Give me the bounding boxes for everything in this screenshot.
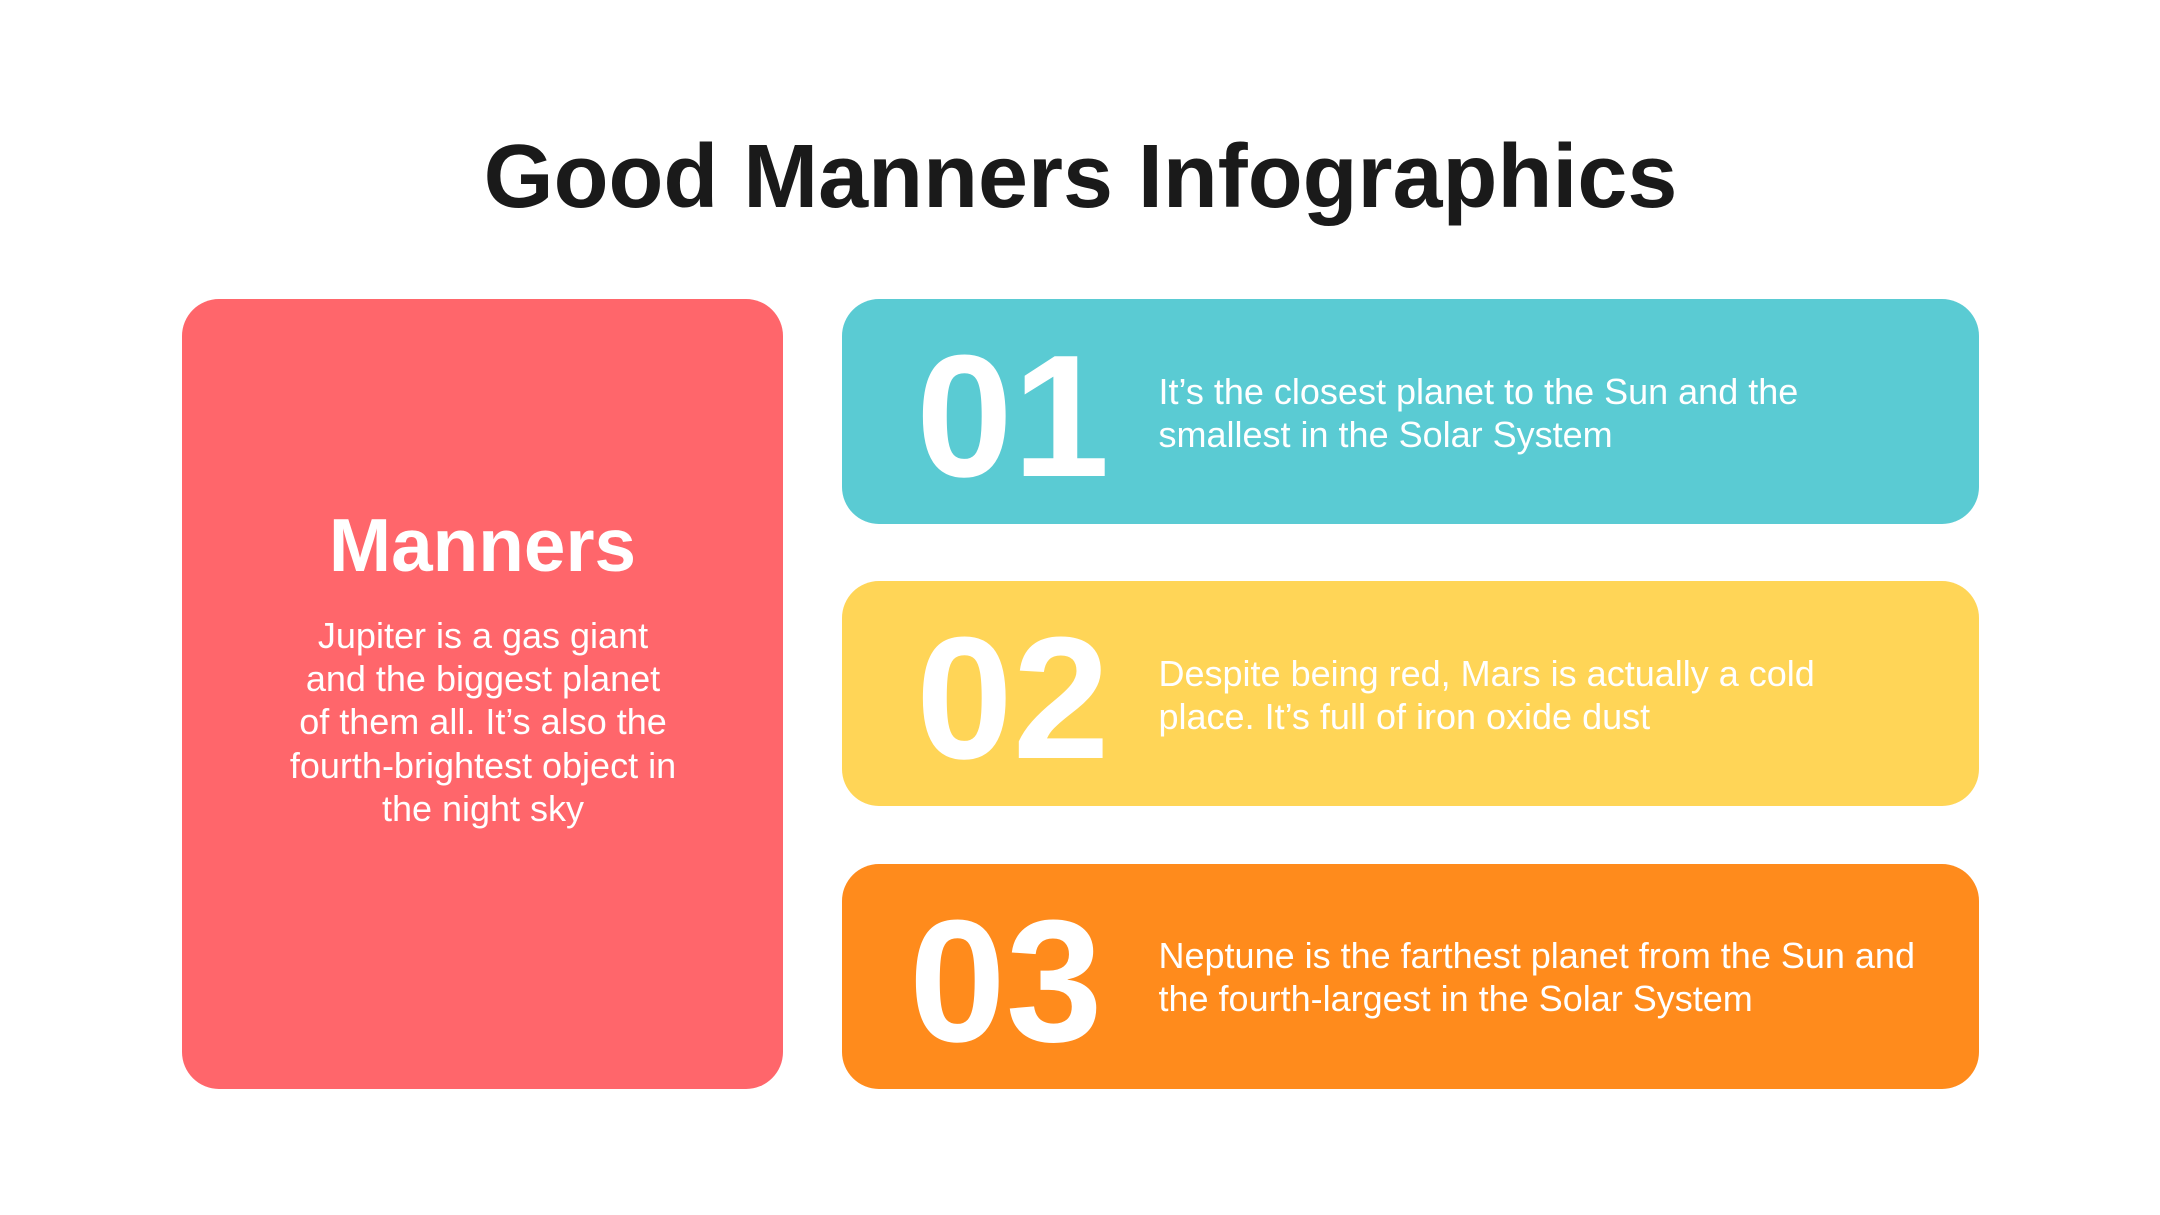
text block: manners description: the night sky — [382, 788, 584, 829]
text block: manners description — [290, 615, 676, 829]
text block: item 01: It’s the closest planet to the Sun and the — [1158, 371, 1798, 412]
text block: manners description: fourth-brightest object in — [290, 745, 676, 786]
text block: item 03: Neptune is the farthest planet from the Sun and — [1158, 935, 1915, 976]
panel: item 03 — [842, 864, 1979, 1088]
text block: manners description: and the biggest planet — [306, 658, 660, 699]
text block: item 02 — [1158, 653, 1815, 737]
text block: item 03 — [1158, 935, 1915, 1019]
number 01: 01 — [916, 318, 1110, 513]
panel: item 02 — [842, 581, 1979, 806]
text block: item 02: place. It’s full of iron oxide dust — [1158, 696, 1650, 737]
text block: manners description: Jupiter is a gas giant — [318, 615, 648, 656]
text block: item 03: the fourth-largest in the Solar System — [1158, 978, 1753, 1019]
number 02: 02 — [916, 600, 1110, 795]
panel: item 01 — [842, 299, 1979, 524]
panel: manners — [182, 299, 783, 1089]
number 03: 03 — [909, 882, 1103, 1078]
text block: item 01 — [1158, 371, 1798, 455]
text block: manners description: of them all. It’s also the — [299, 701, 667, 742]
title: Good Manners Infographics — [484, 127, 1677, 227]
heading: manners: Manners — [329, 503, 636, 587]
text block: item 01: smallest in the Solar System — [1158, 414, 1613, 455]
text block: item 02: Despite being red, Mars is actually a cold — [1158, 653, 1815, 694]
